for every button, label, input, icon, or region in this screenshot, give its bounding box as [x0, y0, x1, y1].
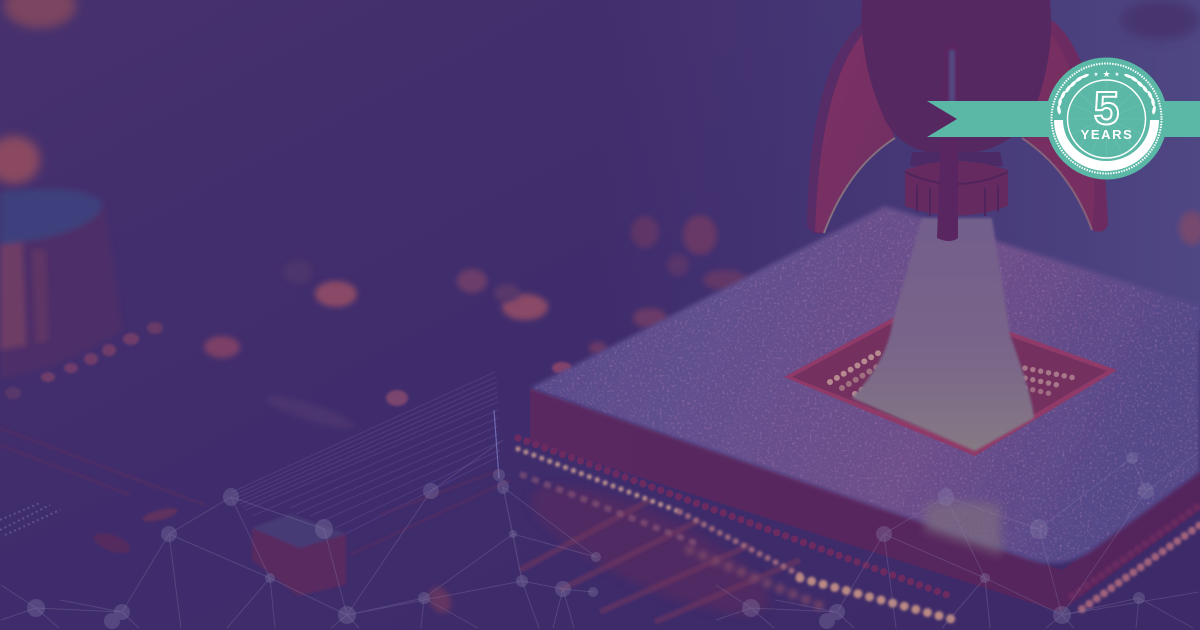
years label: YEARS — [1081, 127, 1133, 142]
chip pins — [518, 438, 1200, 620]
centre fin — [937, 44, 958, 241]
processor chip — [530, 206, 1200, 612]
white crescent banner — [1054, 120, 1159, 171]
circuit traces and board components — [0, 372, 800, 630]
nozzle collar — [910, 152, 1003, 166]
rocket body — [861, 0, 1051, 154]
left fin — [807, 20, 895, 234]
stars: ★ — [1115, 71, 1120, 78]
bokeh lights on the circuit board — [0, 0, 1200, 434]
stars: ★ — [1094, 71, 1099, 78]
laurel left — [1057, 73, 1089, 115]
small chip component — [252, 514, 346, 596]
sunburst rays — [1068, 81, 1145, 157]
chip top surface — [530, 206, 1200, 564]
capacitor knob at left — [0, 189, 122, 378]
socket balls left — [830, 352, 888, 394]
anniversary ribbon — [927, 101, 1200, 137]
5 years badge — [1046, 58, 1168, 180]
yellow reflection at chip edge — [925, 502, 1002, 555]
socket balls right — [1025, 368, 1075, 394]
chip side walls — [530, 388, 1200, 612]
stars — [1094, 69, 1120, 79]
laurel right — [1124, 73, 1156, 115]
inner medallion — [1068, 80, 1146, 158]
right fin — [1022, 20, 1108, 232]
socket opening — [784, 301, 1117, 456]
rocket — [807, 0, 1108, 241]
exhaust flame — [852, 218, 1034, 451]
network overlay — [1, 440, 1199, 629]
numeral 5: 5 — [1094, 82, 1119, 134]
stars: ★ — [1102, 69, 1111, 79]
